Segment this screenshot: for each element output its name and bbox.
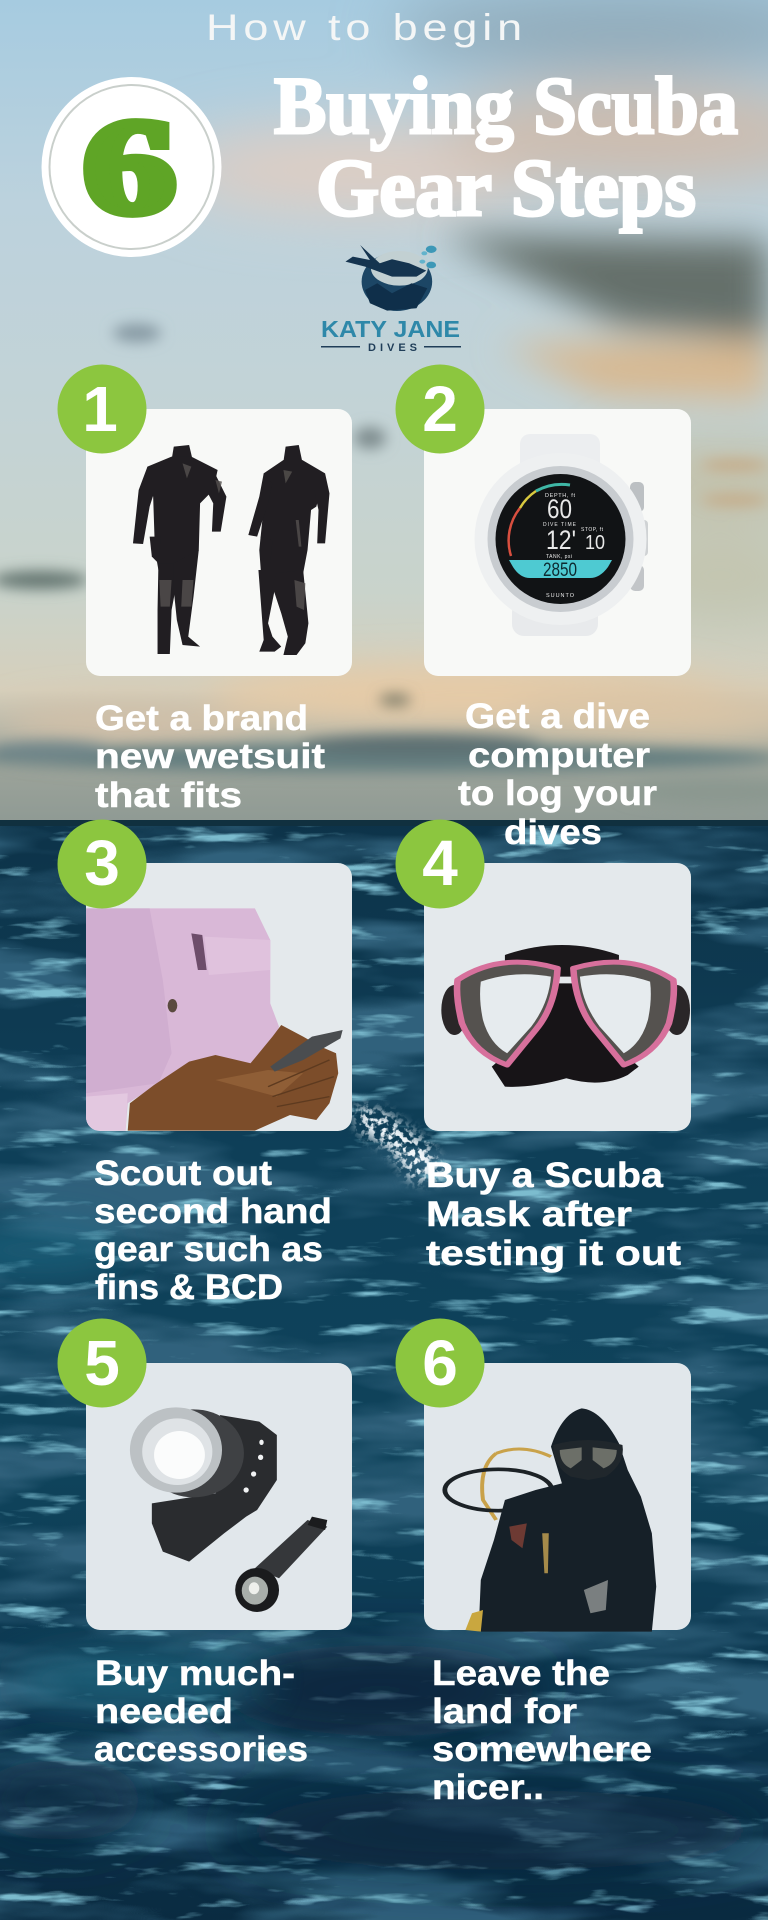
caption 5: needed bbox=[95, 1691, 233, 1731]
caption 1: Get a brand bbox=[95, 698, 308, 738]
caption 2 bbox=[458, 696, 657, 852]
number 4 badge: 4 bbox=[422, 827, 458, 899]
logo: Katy Jane Dives: DIVES bbox=[368, 342, 417, 354]
caption 6: Leave the bbox=[432, 1653, 610, 1693]
number 6 badge bbox=[396, 1318, 484, 1408]
caption 6: nicer.. bbox=[432, 1767, 544, 1807]
image: scuba diver bbox=[445, 1408, 656, 1632]
caption 6: land for bbox=[432, 1691, 577, 1731]
image: person using phone bbox=[86, 908, 343, 1131]
number 4 badge bbox=[396, 820, 484, 908]
title: Buying Scuba Gear Steps bbox=[274, 60, 738, 233]
image: compass and torch bbox=[130, 1407, 327, 1612]
caption 2: dives bbox=[504, 812, 602, 852]
caption 4: testing it out bbox=[426, 1233, 681, 1273]
caption 4: Mask after bbox=[426, 1194, 632, 1234]
panel: step 4 scuba mask bbox=[396, 820, 691, 1273]
number 3 badge bbox=[58, 820, 146, 908]
image: dive computer watch: SUUNTO bbox=[546, 593, 575, 599]
panel: step 1 wetsuit bbox=[58, 364, 352, 815]
caption 6: somewhere bbox=[432, 1729, 652, 1769]
caption 3: second hand bbox=[94, 1191, 332, 1231]
image: dive computer watch: 10 bbox=[585, 532, 605, 554]
image: dive computer watch: TANK, psi bbox=[546, 554, 572, 560]
panel: step 2 dive computer bbox=[396, 364, 691, 852]
heading: How to begin: How to begin bbox=[206, 7, 527, 48]
card 4 background bbox=[424, 863, 691, 1131]
title: Buying Scuba Gear Steps: Gear Steps bbox=[316, 142, 696, 233]
image: dive computer watch: 12' bbox=[546, 525, 576, 555]
caption 3: Scout out bbox=[94, 1153, 272, 1193]
caption 3: fins & BCD bbox=[95, 1267, 283, 1307]
caption 5: accessories bbox=[94, 1729, 308, 1769]
caption 2: computer bbox=[468, 735, 650, 775]
caption 3: gear such as bbox=[94, 1229, 323, 1269]
image: dive computer watch: STOP, ft bbox=[581, 527, 604, 533]
number 5 badge bbox=[58, 1318, 146, 1408]
card 3 background bbox=[86, 863, 352, 1131]
caption 1: that fits bbox=[95, 775, 242, 815]
number 6 badge: 6 bbox=[422, 1327, 458, 1399]
card 2 background bbox=[424, 409, 691, 676]
image: dive computer watch: 2850 bbox=[543, 560, 577, 581]
caption 3 bbox=[94, 1153, 332, 1307]
caption 4: Buy a Scuba bbox=[426, 1155, 663, 1195]
badge: number 6 bbox=[42, 77, 222, 257]
card 6 background bbox=[424, 1363, 691, 1630]
number 5 badge: 5 bbox=[84, 1327, 120, 1399]
caption 1 bbox=[95, 698, 325, 815]
caption 6 bbox=[432, 1653, 652, 1807]
panel: step 5 accessories bbox=[58, 1318, 352, 1769]
panel: step 6 leave the land bbox=[396, 1318, 691, 1807]
card 1 background bbox=[86, 409, 352, 676]
image: two wetsuits bbox=[133, 445, 329, 655]
logo: Katy Jane Dives: KATY JANE bbox=[321, 316, 460, 342]
number 2 badge bbox=[396, 364, 484, 454]
caption 1: new wetsuit bbox=[95, 736, 325, 776]
number 1 badge: 1 bbox=[82, 373, 118, 445]
caption 2: to log your bbox=[458, 773, 657, 813]
number 2 badge: 2 bbox=[422, 373, 458, 445]
title: Buying Scuba Gear Steps: Buying Scuba bbox=[274, 60, 738, 151]
image: dive computer watch: DEPTH, ft bbox=[545, 493, 575, 499]
panel: step 3 second hand gear bbox=[58, 820, 352, 1307]
caption 5: Buy much- bbox=[95, 1653, 295, 1693]
logo: Katy Jane Dives bbox=[321, 245, 461, 354]
caption 2: Get a dive bbox=[465, 696, 650, 736]
caption 4 bbox=[426, 1155, 681, 1273]
image: dive computer watch: DIVE TIME bbox=[543, 522, 577, 528]
card 5 background bbox=[86, 1363, 352, 1630]
image: dive computer watch: 60 bbox=[547, 494, 572, 524]
number 1 badge bbox=[58, 364, 146, 454]
image: dive computer watch bbox=[474, 434, 648, 636]
caption 5 bbox=[94, 1653, 308, 1769]
image: pink scuba mask bbox=[441, 945, 690, 1087]
badge: number 6: 6 bbox=[83, 93, 176, 242]
number 3 badge: 3 bbox=[84, 827, 120, 899]
